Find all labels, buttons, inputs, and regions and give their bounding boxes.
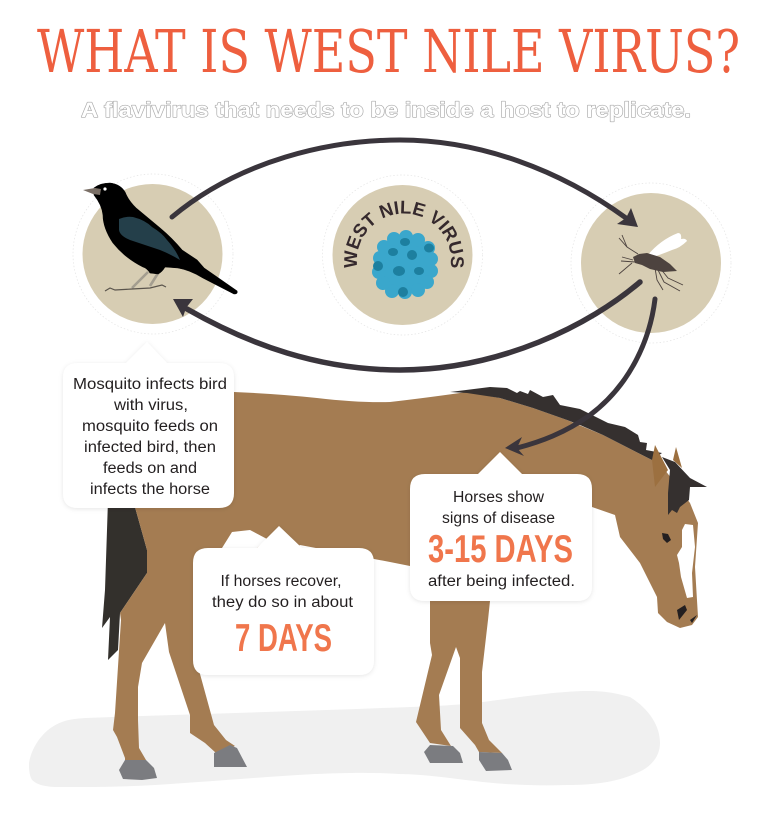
ground shadow bbox=[29, 691, 660, 787]
recovery text: If horses recover, bbox=[220, 573, 342, 590]
horse ears bbox=[652, 445, 682, 487]
arrow: bird to mosquito bbox=[172, 140, 638, 227]
horse forelock bbox=[662, 457, 707, 515]
callout text: infects the horse bbox=[90, 481, 210, 498]
panel: mosquito circle bbox=[571, 183, 731, 343]
horse bbox=[102, 387, 707, 780]
callout text: feeds on and bbox=[103, 460, 197, 477]
panel: virus circle bbox=[322, 174, 483, 336]
recovery text: they do so in about bbox=[212, 594, 354, 611]
recovery text: 7 DAYS bbox=[235, 617, 332, 660]
horse tail bbox=[102, 500, 147, 660]
subtitle: A flavivirus that needs to be inside a host to replicate. bbox=[81, 99, 691, 122]
signs text bbox=[428, 489, 575, 590]
horse body and legs bbox=[113, 392, 698, 760]
callout: transmission bbox=[63, 342, 234, 508]
icon: mosquito bbox=[619, 233, 687, 291]
callout: recovery bbox=[193, 526, 374, 675]
signs text: after being infected. bbox=[428, 573, 575, 590]
panel: bird circle bbox=[73, 174, 237, 334]
horse hooves bbox=[119, 745, 512, 780]
signs text: Horses show bbox=[453, 489, 545, 506]
recovery text bbox=[212, 573, 354, 660]
icon: virus bbox=[372, 230, 438, 299]
icon: bird bbox=[83, 183, 237, 294]
signs text: 3-15 DAYS bbox=[428, 528, 573, 571]
callout: signs of disease bbox=[410, 452, 592, 601]
horse nostril and mouth bbox=[677, 605, 697, 623]
arrow: mosquito to bird bbox=[173, 282, 640, 370]
callout text bbox=[73, 376, 227, 498]
arrow: mosquito to horse bbox=[505, 299, 655, 456]
signs text: signs of disease bbox=[442, 510, 555, 527]
callout text: infected bird, then bbox=[84, 439, 216, 456]
horse blaze bbox=[677, 524, 695, 598]
callout text: mosquito feeds on bbox=[82, 418, 218, 435]
circular label: WEST NILE VIRUS bbox=[344, 200, 464, 268]
callout text: Mosquito infects bird bbox=[73, 376, 227, 393]
horse eye bbox=[662, 533, 671, 543]
horse mane bbox=[450, 387, 662, 460]
callout text: with virus, bbox=[113, 397, 188, 414]
